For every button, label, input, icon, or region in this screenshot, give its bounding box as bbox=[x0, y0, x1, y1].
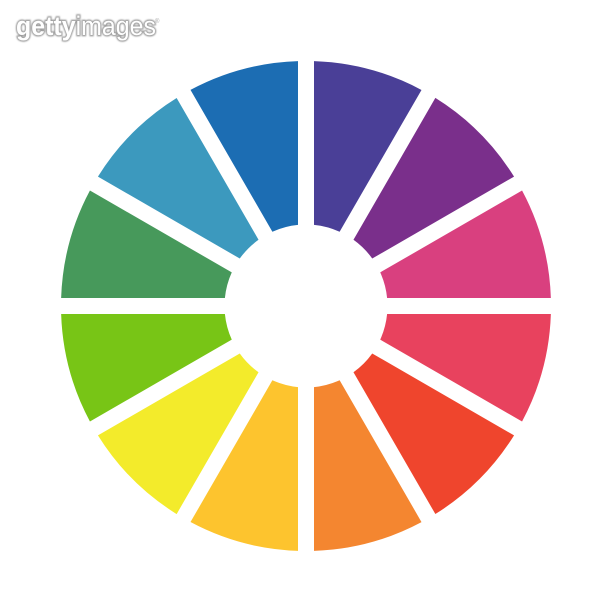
segment: red bbox=[313, 350, 514, 528]
segment: orange bbox=[243, 374, 422, 576]
watermark: gettyimages: gettyimages bbox=[16, 11, 156, 41]
segment: light blue bbox=[98, 84, 299, 262]
segment: purple bbox=[350, 98, 528, 299]
segment: indigo bbox=[314, 61, 422, 232]
colour wheel bbox=[36, 36, 576, 576]
watermark: gettyimages: ® bbox=[155, 18, 160, 25]
segment: rose bbox=[380, 314, 551, 422]
segment: amber bbox=[190, 380, 298, 551]
segment: yellow bbox=[84, 313, 262, 514]
segment: blue bbox=[190, 36, 369, 238]
segment: green bbox=[61, 190, 232, 298]
segment: magenta bbox=[374, 190, 576, 369]
watermark: gettyimages: gettyimages bbox=[16, 11, 156, 41]
segment: lime green bbox=[36, 243, 238, 422]
